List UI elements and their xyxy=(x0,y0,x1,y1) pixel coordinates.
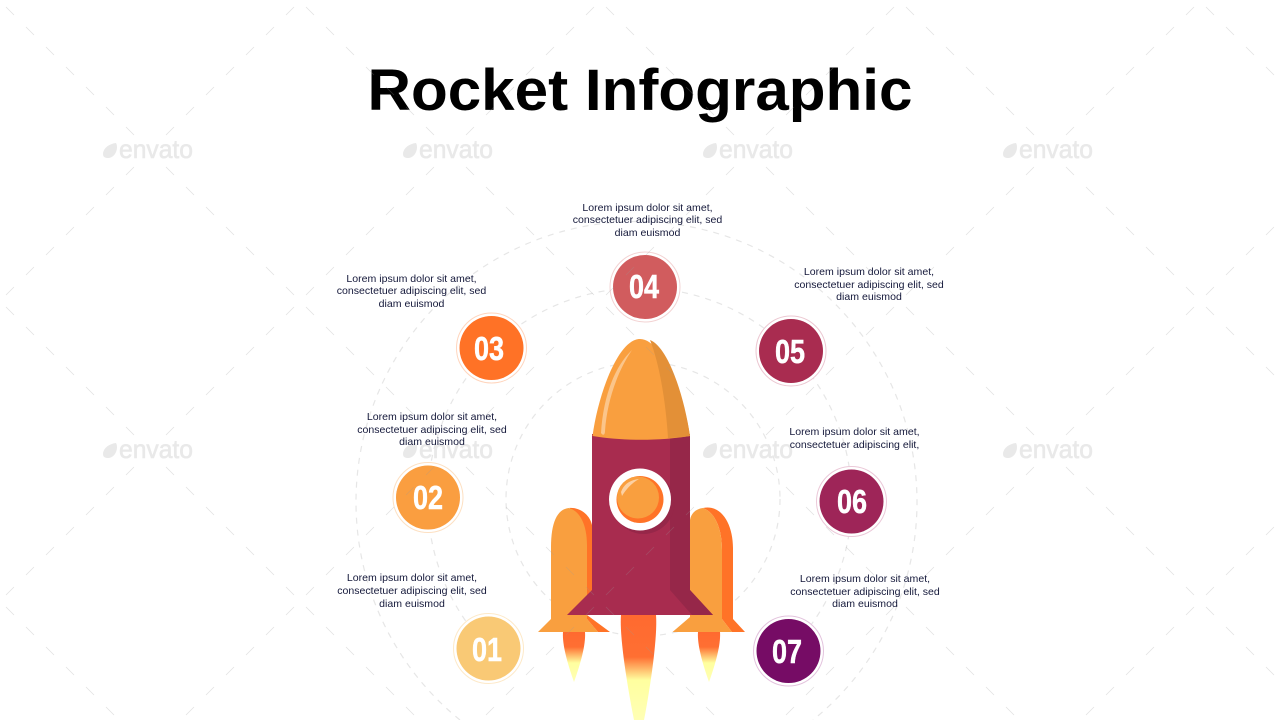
text block 07: consectetuer adipiscing elit, sed xyxy=(790,586,940,598)
text block 04: consectetuer adipiscing elit, sed xyxy=(573,214,722,226)
text block 02 xyxy=(357,411,507,448)
text block 03: diam euismod xyxy=(379,298,444,310)
step 06: 06 xyxy=(837,485,867,521)
title: Rocket Infographic xyxy=(368,58,912,123)
watermark logos: envato xyxy=(419,434,493,464)
text block 04: Lorem ipsum dolor sit amet, xyxy=(582,202,713,214)
step 03 xyxy=(456,313,526,383)
text block 02: diam euismod xyxy=(399,436,465,448)
text block 06: consectetuer adipiscing elit, xyxy=(790,439,919,451)
text block 01 xyxy=(337,572,487,610)
window xyxy=(609,468,671,530)
text block 05: Lorem ipsum dolor sit amet, xyxy=(804,266,934,278)
step 07: 07 xyxy=(772,635,802,671)
rocket body xyxy=(567,434,713,615)
watermark logos: envato xyxy=(119,434,193,464)
step 02: 02 xyxy=(413,481,443,517)
dashed orbit rings xyxy=(356,221,917,720)
text block 03: Lorem ipsum dolor sit amet, xyxy=(346,273,477,285)
watermark logos: envato xyxy=(1019,134,1093,164)
text block 04 xyxy=(573,202,722,239)
text block 06: Lorem ipsum dolor sit amet, xyxy=(789,426,920,438)
flame: centre xyxy=(621,615,656,720)
text block 07: diam euismod xyxy=(832,598,898,610)
nose highlight xyxy=(601,350,632,435)
text block 05: diam euismod xyxy=(836,291,902,303)
watermark logos: envato xyxy=(719,134,793,164)
watermark logos: envato xyxy=(119,134,193,164)
step 07 xyxy=(754,616,824,686)
watermark logos: envato xyxy=(1019,434,1093,464)
flame: right xyxy=(698,632,720,682)
watermark logos: envato xyxy=(419,134,493,164)
nose cone xyxy=(592,339,690,440)
step 01 xyxy=(454,614,524,684)
nose shade xyxy=(650,340,690,438)
text block 02: consectetuer adipiscing elit, sed xyxy=(357,424,507,436)
step 03: 03 xyxy=(474,332,504,368)
text block 04: diam euismod xyxy=(615,227,680,239)
step 02 xyxy=(393,462,463,532)
step 01: 01 xyxy=(472,633,502,669)
step 05 xyxy=(756,316,826,386)
booster: right xyxy=(672,508,745,632)
text block 01: consectetuer adipiscing elit, sed xyxy=(337,585,487,597)
text block 01: Lorem ipsum dolor sit amet, xyxy=(347,572,477,584)
flame: left xyxy=(563,632,585,682)
text block 02: Lorem ipsum dolor sit amet, xyxy=(367,411,497,423)
step 04: 04 xyxy=(629,270,659,306)
text block 07: Lorem ipsum dolor sit amet, xyxy=(800,573,930,585)
step 06 xyxy=(816,466,886,536)
rocket xyxy=(538,339,745,720)
text block 05: consectetuer adipiscing elit, sed xyxy=(794,279,944,291)
watermark logos xyxy=(103,134,1093,464)
step 05: 05 xyxy=(775,335,805,371)
step 04 xyxy=(610,252,680,322)
text block 05 xyxy=(794,266,944,303)
text block 07 xyxy=(790,573,940,610)
window shadow xyxy=(612,472,674,534)
text block 03 xyxy=(337,273,486,310)
text block 03: consectetuer adipiscing elit, sed xyxy=(337,285,486,297)
body shade xyxy=(670,436,713,615)
text block 01: diam euismod xyxy=(379,598,445,610)
text block 06 xyxy=(789,426,920,451)
booster: left xyxy=(538,508,610,632)
watermark logos: envato xyxy=(719,434,793,464)
